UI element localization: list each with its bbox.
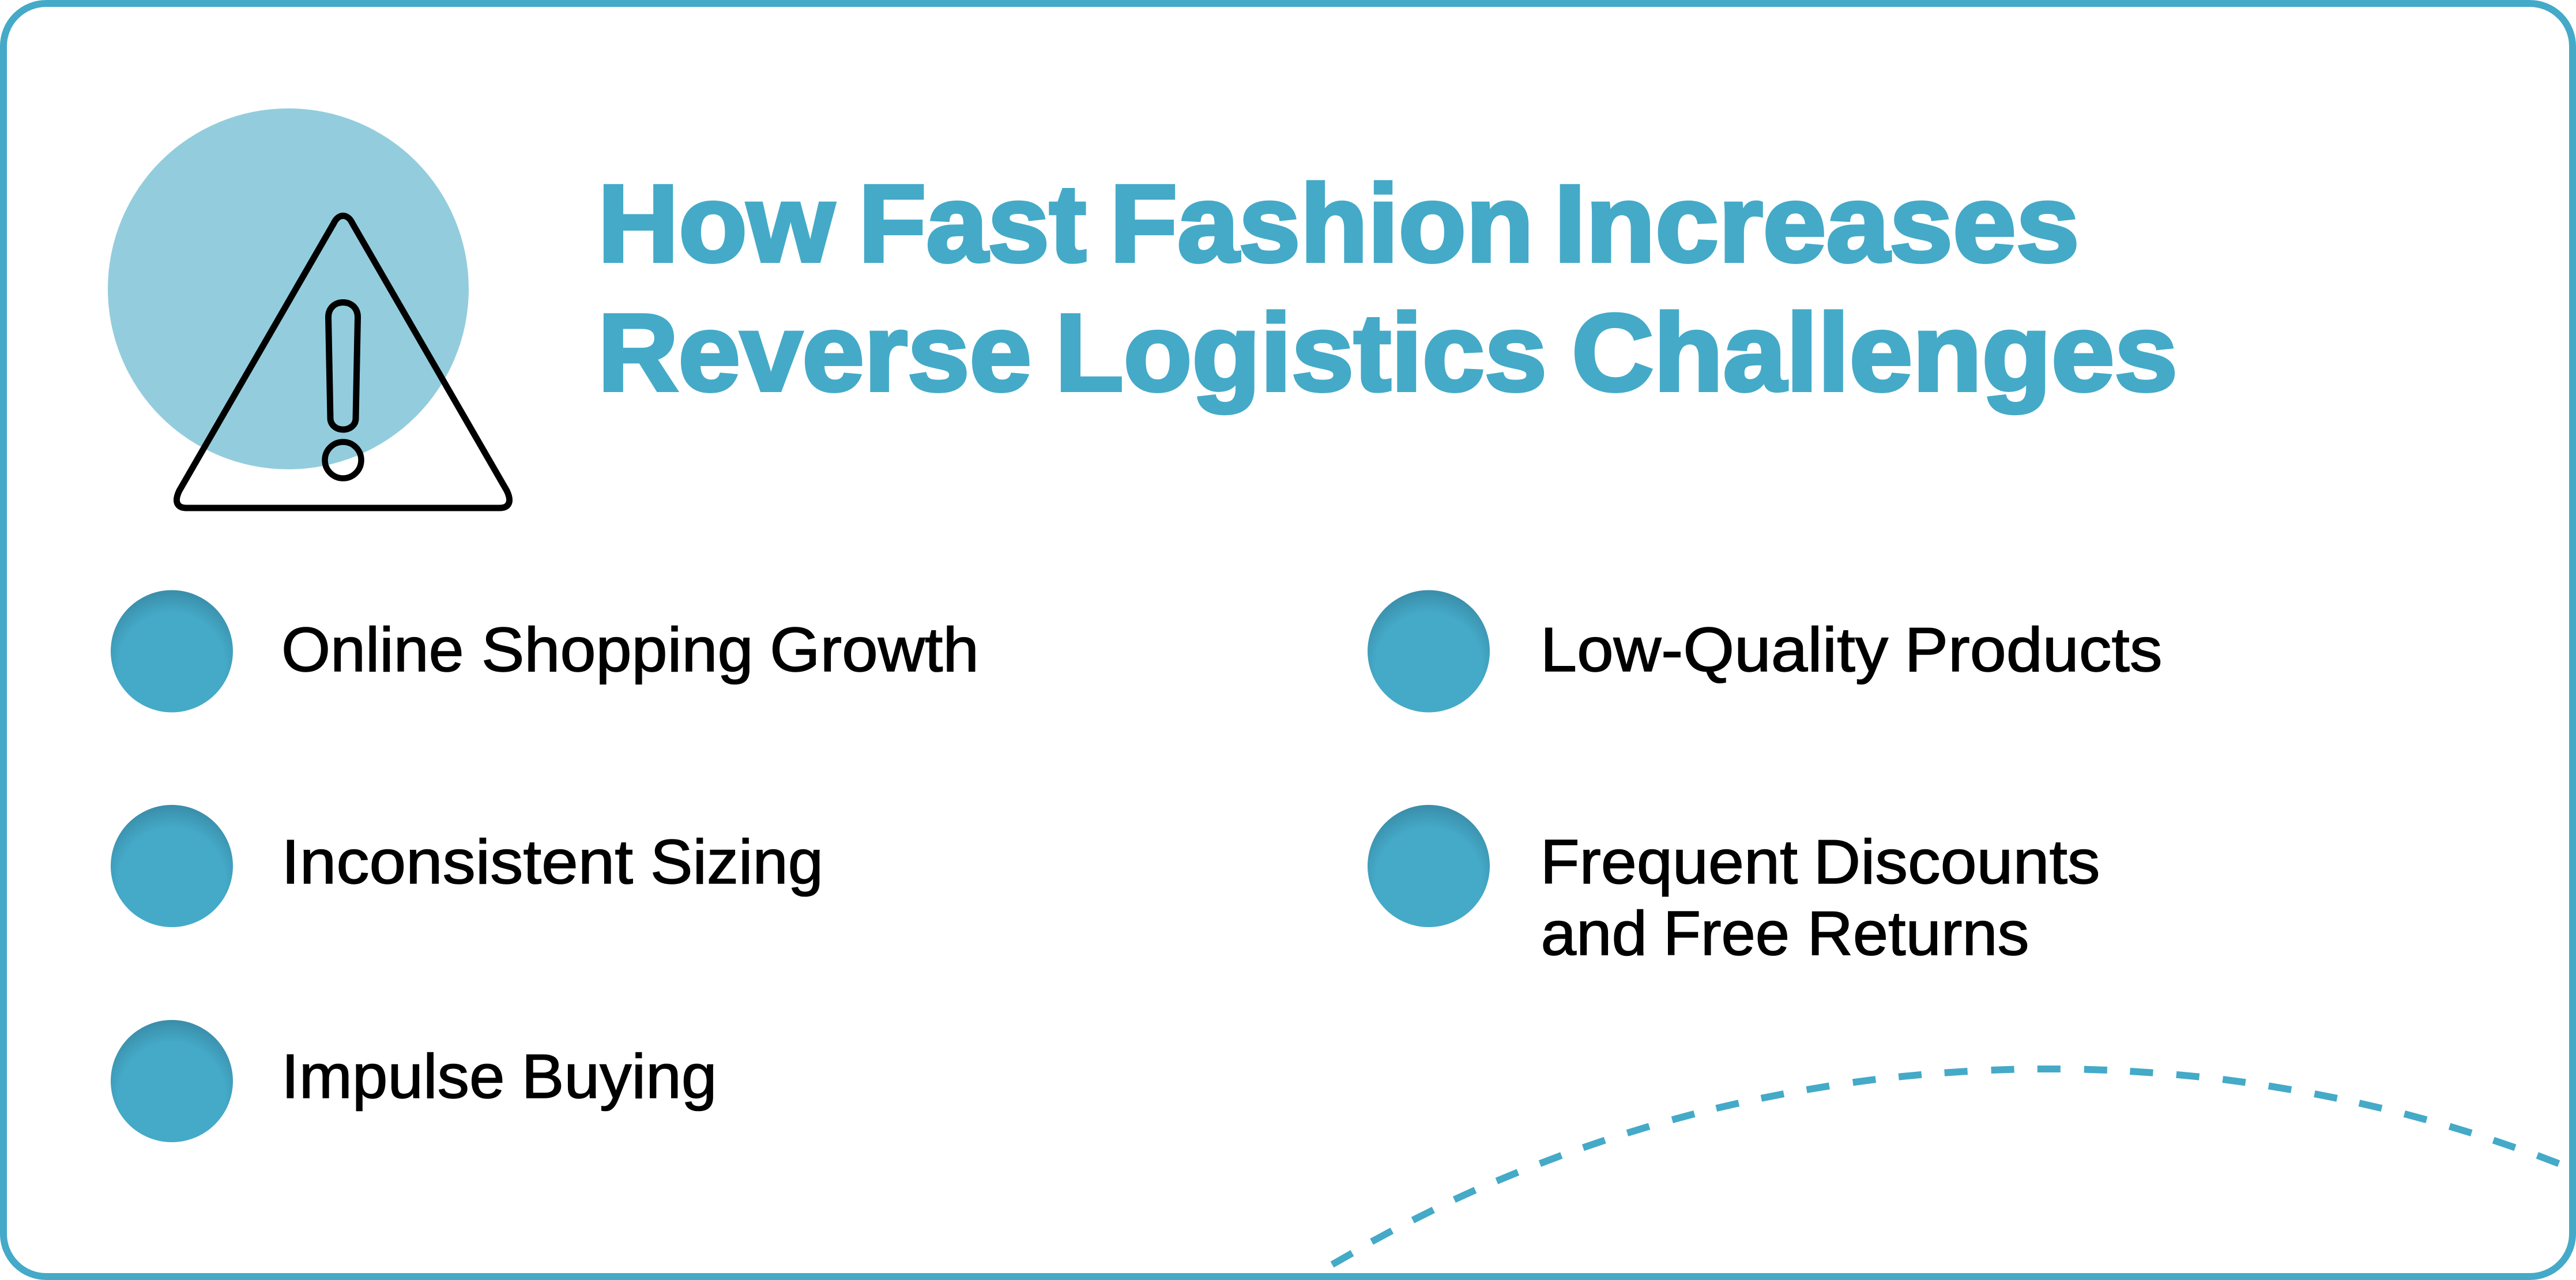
label: Buying xyxy=(521,1041,717,1112)
icon: bullet circle xyxy=(111,590,233,713)
title: Fast xyxy=(858,163,1086,285)
label: and xyxy=(1541,898,1647,969)
dashed arc xyxy=(1332,1069,2559,1264)
label: Frequent xyxy=(1541,827,1798,897)
label: Impulse xyxy=(281,1041,505,1112)
label xyxy=(281,1041,717,1112)
title xyxy=(598,163,2178,414)
label: Online xyxy=(281,615,464,685)
title: Logistics xyxy=(1055,292,1547,414)
title: Increases xyxy=(1554,163,2080,285)
title: Challenges xyxy=(1572,292,2178,414)
icon: exclamation dot xyxy=(325,442,361,479)
label: Shopping xyxy=(481,615,753,685)
label: Products xyxy=(1905,615,2162,685)
label: Low-Quality xyxy=(1541,615,1889,685)
label: Growth xyxy=(770,615,979,685)
label xyxy=(1541,615,2162,685)
item: Online Shopping Growth xyxy=(111,590,979,713)
icon: exclamation bar xyxy=(329,302,357,430)
icon: bullet circle xyxy=(111,1020,233,1142)
title: Fashion xyxy=(1110,163,1534,285)
label xyxy=(281,615,979,685)
icon: bullet circle xyxy=(1368,590,1490,713)
title: How xyxy=(598,163,835,285)
label: Free xyxy=(1663,898,1790,969)
icon: bullet circle xyxy=(111,805,233,927)
item: Inconsistent Sizing xyxy=(111,805,823,927)
item: Impulse Buying xyxy=(111,1020,717,1142)
label: Returns xyxy=(1807,898,2029,969)
icon: warning triangle on pale circle xyxy=(108,108,510,508)
label xyxy=(1541,827,2100,969)
label: Inconsistent xyxy=(281,827,633,897)
label: Discounts xyxy=(1814,827,2100,897)
icon: bullet circle xyxy=(1368,805,1490,927)
item: Frequent Discounts and Free Returns xyxy=(1368,805,2100,969)
item: Low-Quality Products xyxy=(1368,590,2162,713)
icon: pale blue circle xyxy=(108,108,469,469)
icon: triangle outline xyxy=(176,216,510,508)
title: Reverse xyxy=(598,292,1031,414)
label xyxy=(281,827,823,897)
label: Sizing xyxy=(650,827,823,897)
